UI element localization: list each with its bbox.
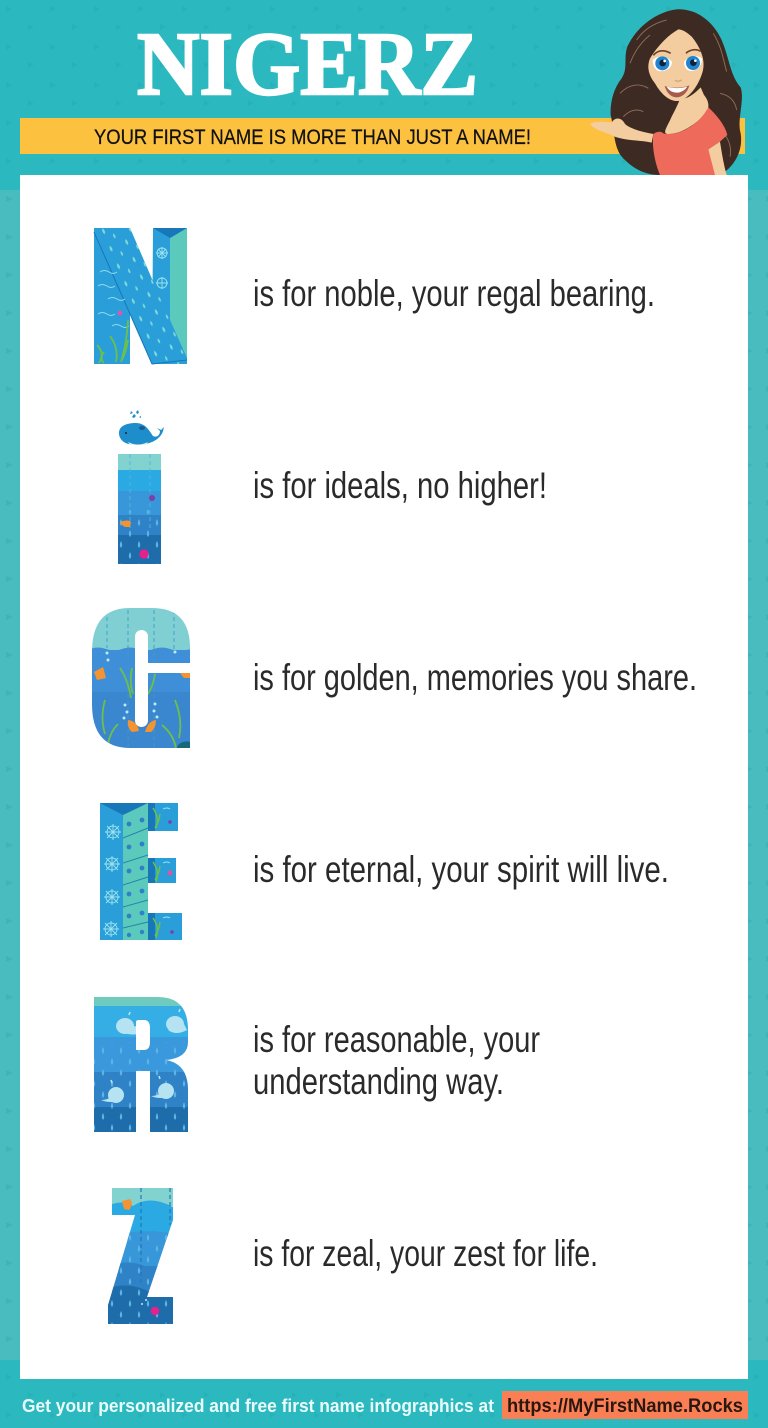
letter G: [90, 606, 192, 750]
footer text: Get your personalized and free first name infographics at: [22, 1396, 494, 1416]
tagline banner: YOUR FIRST NAME IS MORE THAN JUST A NAME!: [94, 126, 531, 149]
letter I with whale: [118, 410, 164, 564]
footer link badge: https://MyFirstName.Rocks: [507, 1396, 743, 1417]
text: N line: is for noble, your regal bearing.: [253, 273, 655, 314]
illustration: woman mascot: [590, 9, 742, 175]
letter E: [100, 803, 182, 940]
letter R: [92, 995, 190, 1134]
text: Z line: is for zeal, your zest for life.: [253, 1233, 598, 1274]
panel: white content: [20, 175, 748, 1379]
title: NIGERZ: [137, 15, 478, 114]
letter N: [94, 228, 187, 364]
text: E line: is for eternal, your spirit will live.: [253, 849, 669, 890]
text: R lines: [253, 1019, 540, 1102]
icon: whale: [119, 410, 164, 445]
text: R lines: is for reasonable, your: [253, 1019, 540, 1060]
text: I line: is for ideals, no higher!: [253, 465, 547, 506]
tagline banner: [20, 118, 745, 154]
letter Z: [105, 1186, 175, 1326]
text: R lines: understanding way.: [253, 1061, 504, 1102]
